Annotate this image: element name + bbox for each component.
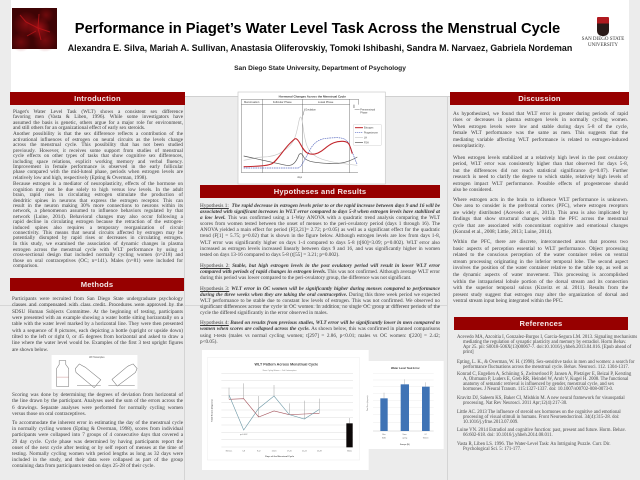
text: discussion paragraph 4: with the superior temporal sulcus (Kravitz et al. 2011). Results from the bbox=[453, 285, 628, 291]
text: hypothesis 3: cycle the differed significantly in the error observed in males. bbox=[200, 310, 328, 316]
text: intro paragraph 1: favoring men (Vasta & Liben, 1996). While some investigators have bbox=[13, 114, 183, 120]
line: normally cycling women bbox=[229, 399, 320, 417]
text: intro paragraph 2: across the menstrual cycle. This possibility that has not been studied bbox=[13, 142, 183, 148]
text: hypothesis 3: during the three weeks when they are taking the oral contraceptive. During this three week period we expected bbox=[200, 292, 440, 298]
text: hypothesis 1: WLT error was significantly higher on days 1-4 compared to days 5-8 (t[60]=3.09; p=0.002). WLT error also bbox=[200, 240, 440, 246]
legend bbox=[354, 125, 381, 145]
chart: WLT pattern across menstrual cycle: 25-28 bbox=[317, 450, 322, 452]
chart: WLT pattern across menstrual cycle: 13-16 bbox=[272, 450, 277, 452]
reference: Kravitz bbox=[457, 395, 625, 406]
heading: hypotheses and results: Hypotheses and Results bbox=[274, 187, 366, 196]
reference: Konrad: hormones. J Neural Transm. 115:1327-1337. doi: 10.1007/s00702-008-0073-0. bbox=[463, 387, 613, 392]
legend: Progesterone bbox=[364, 132, 379, 135]
text: hypothesis 1: associated with significant increases in WLT error compared to days 5-8 when estrogen levels have stabilized at bbox=[200, 209, 440, 215]
chart: hormonal changes across the menstrual cycle: Hormonal Changes Across the Menstrual Cycle bbox=[279, 94, 346, 98]
text: methods paragraph 1: with a sequence of 8 pictures, each depicting a bottle (upright or upside down) bbox=[12, 328, 183, 334]
reference: Konrad: Konrad C, Engelien A, Schöning S, Zwitserlood P, Jansen A, Pletziger E, Beizai P, Kersting bbox=[457, 372, 631, 376]
chart: hormonal changes across the menstrual cycle: Ovulation bbox=[305, 109, 316, 112]
text: intro paragraph 2 bbox=[13, 131, 183, 181]
bars bbox=[380, 384, 429, 431]
reference: Vasta: Vasta R, Liben LS. 1996. The Water-Level Task: An Intriguing Puzzle. Curr. Dir. bbox=[457, 442, 611, 446]
reference: Epting: performance fluctuations across the menstrual cycle. Behav. Neurosci. 112. 1304-1317. bbox=[463, 365, 629, 370]
text: methods paragraph 2: 6 drawings. Separate analyses were performed for normally cycling women bbox=[12, 405, 183, 411]
text: discussion paragraph 2: estrogen impact WLT performance. Possible effects of progesterone should bbox=[453, 181, 628, 187]
legend: FSH bbox=[364, 142, 369, 144]
text: intro paragraph 4: estrogen across the menstrual cycle with WLT performance by using a bbox=[13, 247, 183, 253]
text: hypothesis 2 bbox=[200, 263, 440, 281]
text: discussion paragraph 2 bbox=[453, 155, 628, 193]
chart: WLT pattern across menstrual cycle: Norm. Cycling Women — Oral Contraceptives bbox=[263, 369, 297, 372]
text: hypothesis 1: trend (F[1] = 5.75; p=0.02) that is shown in the figure below. Although estrogen levels are low from days 1-8, bbox=[200, 233, 440, 239]
heading: references bbox=[454, 317, 628, 330]
reference: Little: 10.1016/j.yfrne.2013.07.009. bbox=[463, 420, 518, 425]
text: hypothesis 4: Hypothesis 4: Based on results from previous studies, WLT error will be significantly lower in men compared to bbox=[200, 320, 440, 326]
text: discussion paragraph 1: neuroplasticity. bbox=[453, 143, 485, 149]
chart: hormonal changes across the menstrual cycle: Phase bbox=[360, 111, 368, 114]
text: hypothesis 4: using t-tests (males vs normal cycling women; t[297] = 2.86, p<0.01; males vs OC women: t[220] = 2.42; bbox=[200, 333, 440, 339]
authors: Alexandra E. Silva, Mariah A. Sullivan, Anastasia Oliferovskiy, Tomoki Ishibashi, Sandra M. Narvaez, Gabriela Nordeman bbox=[68, 43, 572, 53]
text: intro paragraph 2: activational influences of estrogen on neural circuits as the levels change bbox=[13, 137, 183, 143]
text: methods paragraph 1: SDSU Human Subjects Committee. At the beginning of testing, participants bbox=[12, 309, 183, 315]
reference: Acevedo: Acevedo MA, Azcoitia I, Gonzalez-Burgos I, Garcia-Segura LM. 2013. Signaling mechanisms bbox=[457, 334, 637, 340]
text: discussion paragraph 3: cycle that are associated with concomitant cognitive and emotional changes bbox=[453, 223, 628, 229]
text: hypothesis 1: ANOVA yielded a main effect for period (F[3,21]= 2.72; p<0.05) as well as a significant effect for the quadratic bbox=[200, 227, 440, 233]
text: discussion paragraph 3: (Konrad et al., 2008; Little, 2013; Luine, 2014). bbox=[453, 229, 552, 235]
text: intro paragraph 2: phase compared with the mid-luteal phase, periods when estrogen levels are bbox=[13, 169, 183, 175]
panel: introduction bbox=[10, 92, 185, 269]
text: methods paragraph 1: line where the water level would be. Examples of the first 3 test upright figures bbox=[12, 340, 183, 346]
line: FSH bbox=[244, 154, 357, 165]
chart: WLT pattern across menstrual cycle: 5-8 bbox=[243, 450, 245, 452]
text: methods paragraph 3: in normally cycling women (Epting & Overman, 1998), scores from individual bbox=[12, 426, 183, 432]
text: hypothesis 1: tested on days 13-16 compared to days 5-8 (t[55] = 3.21; p=0.002). bbox=[200, 252, 340, 258]
chart: WLT pattern across menstrual cycle: Males bbox=[348, 450, 352, 452]
panel: discussion bbox=[450, 92, 629, 304]
logo: San Diego State University: SAN DIEGO STATE bbox=[582, 37, 624, 42]
text: intro paragraph 4: cross-sectional design that included normally cycling women (n=218) and bbox=[13, 252, 183, 258]
text: methods paragraph 3: containing data from participants tested on days 25-28 of their cycle. bbox=[12, 463, 155, 469]
heading: discussion bbox=[450, 92, 629, 105]
text: discussion paragraph 3: findings that show structural changes within the PFC across the menstrual bbox=[453, 216, 628, 222]
chart: hormonal changes across the menstrual cycle: Luteal Phase bbox=[318, 100, 334, 104]
text: methods paragraph 3 bbox=[12, 420, 183, 469]
text: methods paragraph 1: classes and compensated with class credit. Procedures were approved by the bbox=[12, 302, 183, 308]
chart: water level task error bars: Women bbox=[423, 438, 428, 440]
reference: Kravitz: processing. Nat Rev Neurosci. 2011 Apr;12(4):217-30. bbox=[463, 401, 567, 406]
reference: Luine: Luine VN. 2014 Estradiol and cognitive function: past, present and future. Horm. Behav. bbox=[457, 428, 626, 432]
chart: hormonal changes across the menstrual cycle: Follicular Phase bbox=[273, 100, 292, 104]
text: hypothesis 1 bbox=[200, 203, 440, 258]
chart: WLT pattern across menstrual cycle: 9-12 bbox=[257, 450, 261, 452]
title: Performance in Piaget’s Water Level Task Across the Menstrual Cycle bbox=[75, 21, 560, 37]
text: methods paragraph 1: Participants were recruited from San Diego State undergraduate psychology bbox=[12, 296, 183, 302]
text: discussion paragraph 2: also be considered. bbox=[453, 187, 493, 193]
text: intro paragraph 2: relatively low and high, respectively (Epting & Overman, 1998). bbox=[13, 175, 147, 181]
text: discussion paragraph 4: the dynamic aspects of water movement. This processing is accomplished bbox=[453, 272, 628, 278]
icon: upright bottle bbox=[57, 361, 69, 386]
chart: water level task error bars: OC bbox=[424, 434, 427, 436]
logo: San Diego State University bbox=[582, 17, 624, 48]
reference: Konrad bbox=[457, 372, 632, 392]
error bars bbox=[229, 383, 350, 423]
text: methods paragraph 3: 29 day cycle. Cycle phase was determined by having participants report the bbox=[12, 438, 183, 444]
text: hypothesis 4: p<0.05). bbox=[200, 339, 218, 345]
line: oral contraceptive women bbox=[229, 395, 320, 430]
text: methods paragraph 2: versus those on oral contraceptives. bbox=[12, 411, 86, 417]
reference: Epting bbox=[457, 359, 635, 370]
text: intro paragraph 3: induced spines also requires a temporary reorganization of circuit bbox=[13, 225, 183, 231]
heading: references: References bbox=[520, 319, 562, 328]
line: estrogen bbox=[244, 139, 352, 167]
text: hypothesis 1: a low level. This was confirmed using a 1-Way ANOVA with a quadratic trend analysis comparing the WLT bbox=[200, 215, 440, 221]
reference: Luine: 66:602-618. doi: 10.1016/j.yhbeh.2014.08.011. bbox=[463, 433, 553, 438]
text: discussion paragraph 4: related to the conscious perception of the water container relies on ventral bbox=[453, 252, 628, 258]
text: hypothesis 3: WLT performance to be stable due to constant low levels of estrogen. This was not confirmed. We observed no bbox=[200, 298, 440, 304]
text: methods paragraph 1: tilted to the left or right 0, or 45 degrees from horizontal and asked to draw a bbox=[12, 334, 183, 340]
text: methods paragraph 2: the line drawn by the participant. Analyses used the sum of the errors across the bbox=[12, 398, 183, 404]
chart: WLT pattern across menstrual cycle: p=0.002 bbox=[240, 434, 248, 436]
text: discussion paragraph 4: involves the position of the water container relative to the table top, as well as bbox=[453, 265, 628, 271]
text: methods paragraph 2 bbox=[12, 392, 183, 417]
text: discussion paragraph 1: female WLT performance was the same as men. This suggests that the bbox=[453, 130, 628, 136]
text: discussion paragraph 4: within the intraparietal lobule portion of the dorsal stream and its connection bbox=[453, 279, 628, 285]
reference: Little: Little AC. 2013 The influence of steroid sex hormones on the cognitive and emotional bbox=[457, 410, 621, 414]
text: intro paragraph 3: cognition may not be due solely to high versus low levels. In the adult bbox=[13, 187, 183, 193]
diagram: WLT example bottles bbox=[52, 355, 138, 389]
text: discussion paragraph 3: are widely distributed (Acevedo et al., 2013). This area is also implicated by bbox=[453, 210, 628, 216]
chart: hormonal changes across the menstrual cycle: Menstruation bbox=[244, 100, 260, 104]
chart: WLT pattern across menstrual cycle: Total Errors (degrees) bbox=[211, 399, 214, 422]
chart: water level task error bars: Norm bbox=[402, 434, 407, 436]
chart: hormonal changes across the menstrual cycle: days bbox=[297, 177, 303, 179]
text: discussion paragraph 1: As hypothesized, we found that WLT error is greater during periods of rapid bbox=[453, 111, 628, 117]
text: discussion paragraph 3 bbox=[453, 197, 628, 235]
text: hypothesis 4 bbox=[200, 320, 440, 345]
text: intro paragraph 4: In this study, we examined the association of dynamic changes in plasma bbox=[13, 241, 183, 247]
chart: water level task error bars: cycling bbox=[402, 438, 407, 440]
chart: water level task error bars: Total Error (degrees) bbox=[366, 395, 369, 411]
legend: LH bbox=[364, 138, 367, 140]
heading: introduction: Introduction bbox=[74, 94, 121, 103]
text: intro paragraph 4: comparison. bbox=[13, 263, 38, 269]
chart: WLT pattern across menstrual cycle bbox=[202, 350, 368, 470]
chart: water level task error bars: Groups (N) bbox=[400, 444, 410, 446]
text: intro paragraph 4: those on oral contraceptives (OC; n=141). Males (n=81) were included for bbox=[13, 258, 183, 264]
logo: red neuron micrograph bbox=[12, 8, 57, 52]
text: methods paragraph 3: onset of the next cycle after testing or by self report of menses at the time of bbox=[12, 445, 183, 451]
text: hypothesis 1: Hypothesis 1: The rapid decrease in estrogen levels prior to or the rapid increase between days 9 and 16 will be bbox=[200, 203, 440, 209]
reference: Vasta bbox=[457, 442, 611, 452]
bar: males bbox=[347, 423, 353, 447]
text: methods paragraph 1 bbox=[12, 296, 183, 353]
panel: hypotheses and results bbox=[200, 185, 440, 345]
text: methods paragraph 1: table with the water level marked by a horizontal line. They were then presented bbox=[12, 321, 183, 327]
chart: WLT pattern across menstrual cycle: Menses bbox=[226, 450, 233, 452]
reference: Little bbox=[457, 409, 621, 425]
text: methods paragraph 3: included in the study, and their data were collapsed as part of the group bbox=[12, 457, 183, 463]
text: hypothesis 1: increased as estrogen levels increased linearly between days 9 and 16, and was significantly higher in women bbox=[200, 246, 440, 252]
text: intro paragraph 4 bbox=[13, 241, 183, 269]
panel: references bbox=[454, 317, 638, 452]
text: intro paragraph 1: Piaget's Water Level Task (WLT) shows a consistent sex difference bbox=[13, 109, 183, 115]
line: progesterone bbox=[244, 138, 357, 168]
reference: Epting: Epting, L. K., & Overman, W. H. (1998). Sex-sensitive tasks in men and women: a search for bbox=[457, 360, 635, 364]
text: hypothesis 2: during this period was lower compared to the peri-ovulatory group, the difference was not significant. bbox=[200, 275, 411, 281]
reference: Luine bbox=[457, 427, 626, 438]
chart: WLT pattern across menstrual cycle: 21-24 bbox=[302, 450, 307, 452]
text: discussion paragraph 4: ventral stream input being integrated within the PFC. bbox=[453, 298, 563, 304]
text: intro paragraph 1 bbox=[13, 109, 183, 131]
reference: Vasta: Psychological Sci. 5: 171-177. bbox=[463, 447, 521, 452]
text: discussion paragraph 1 bbox=[453, 111, 628, 149]
text: discussion paragraph 3: One area to consider is the prefrontal cortex (PFC), where estrogen receptors bbox=[453, 203, 628, 209]
text: intro paragraph 1: and still others for an organizational effect of early sex steroids. bbox=[13, 125, 145, 131]
text: methods paragraph 1: were presented with an example showing a water bottle sitting horizontally on a bbox=[12, 315, 183, 321]
icon: bottle tilted right bbox=[108, 364, 137, 386]
chart: hormonal changes across the menstrual cycle bbox=[238, 92, 386, 184]
text: discussion paragraph 4: stream processing originating in the inferior temporal lobe. The second aspect bbox=[453, 259, 628, 265]
reference: Acevedo: mediating the regulation of synaptic plasticity and memory by estradiol. Horm Behav. bbox=[463, 340, 626, 345]
text: discussion paragraph 2: When estrogen levels stabilized at a relatively high level in the post ovulatory bbox=[453, 155, 628, 161]
text: discussion paragraph 2: but the differences did not reach statistical significance (p=0.07). Further bbox=[453, 168, 628, 174]
text: intro paragraph 3: network (Luine, 2014). Behavioral changes may also occur following a bbox=[13, 214, 183, 220]
heading: methods: Methods bbox=[81, 280, 113, 289]
chart: WLT pattern across menstrual cycle: Days of the Menstrual Cycle bbox=[266, 455, 295, 458]
text: intro paragraph 3: brain, rapid rises in circulating estrogen stimulate the production of bbox=[13, 192, 183, 198]
text: discussion paragraph 4 bbox=[453, 239, 628, 304]
text: hypothesis 2: Hypothesis 2: Stable, but high estrogen levels in the post ovulatory period will result in lower WLT error bbox=[200, 263, 440, 269]
chart: hormonal changes across the menstrual cycle: Premenstrual bbox=[360, 108, 376, 111]
panel: methods bbox=[10, 278, 184, 469]
reference: Acevedo: Apr 25. pii: S0018-506X(13)00067-7. doi:10.1016/j.yhbeh.2013.04.016. [Epub ahead of bbox=[463, 345, 631, 350]
text: intro paragraph 2: Another possibility is that the sex difference reflects a contribution of the bbox=[13, 131, 183, 137]
text: intro paragraph 3: result in the neuron making 30% more connections to neurons within its bbox=[13, 203, 183, 209]
reference: Kravitz: Kravitz DJ, Saleem KS, Baker CI, Mishkin M. A new neural framework for visuospatial bbox=[457, 396, 625, 400]
text: intro paragraph 3: connectivity. This means that neural circuits affected by estrogen may be bbox=[13, 230, 183, 236]
line: LH bbox=[244, 117, 357, 165]
text: intro paragraph 3: rapid decline in circulating estrogen because the retraction of the estrogen- bbox=[13, 219, 183, 225]
text: hypothesis 4: women when scores are collapsed across the cycle. As shown below, this was confirmed in planned comparisons bbox=[200, 326, 440, 332]
text: intro paragraph 2: including space relations, explicit working memory and verbal fluency. bbox=[13, 159, 183, 165]
text: hypothesis 2: compared with periods of rapid changes in estrogen levels. This was not confirmed. Although average WLT error bbox=[200, 269, 440, 275]
text: intro paragraph 3 bbox=[13, 181, 183, 241]
text: discussion paragraph 1: mediating variable affecting WLT performance is related to estrogen-induced bbox=[453, 137, 628, 143]
text: methods paragraph 3: testing. Normally cycling women with period lengths as long as 32 days were bbox=[12, 451, 183, 457]
text: intro paragraph 2: previously. However, it receives some support from studies of menstrual bbox=[13, 148, 183, 154]
text: discussion paragraph 3: Where estrogen acts in the brain to influence WLT performance is unknown. bbox=[453, 197, 628, 203]
text: intro paragraph 1: assumed the basis is genetic, others argue for a major role for environment, bbox=[13, 120, 183, 126]
text: methods paragraph 1: are shown below. bbox=[12, 347, 48, 353]
legend: Estrogen bbox=[364, 127, 374, 130]
text: discussion paragraph 4: basic aspects of perception essential to WLT performance. Object processing bbox=[453, 246, 628, 252]
text: methods paragraph 3: To accommodate the inherent error in estimating the day of the menstrual cycle bbox=[12, 420, 183, 426]
logo: San Diego State University: UNIVERSITY bbox=[588, 43, 618, 48]
text: intro paragraph 3: potentially disrupted by rapid rises or decreases in circulating estrogen. bbox=[13, 235, 183, 241]
text: methods paragraph 3: participants were collapsed into 7 groups of 4 consecutive days that covered a bbox=[12, 432, 183, 438]
text: discussion paragraph 2: period, WLT error was consistently higher than that observed for days 5-8, bbox=[453, 161, 628, 167]
text: discussion paragraph 4: Within the PFC, there are discrete, interconnected areas that process two bbox=[453, 239, 628, 245]
chart: WLT pattern across menstrual cycle: 17-20 bbox=[287, 450, 292, 452]
chart: water level task error bars: N=81 bbox=[382, 438, 386, 440]
text: intro paragraph 3: network, a phenomenon assumed to influence behaviors regulated by that bbox=[13, 208, 183, 214]
heading: hypotheses and results bbox=[200, 185, 440, 198]
heading: methods bbox=[10, 278, 184, 291]
text: hypothesis 3: significant differences across the cycle in OC women. In addition, no single OC group at different periods of the bbox=[200, 304, 440, 310]
reference: Acevedo: print] bbox=[463, 350, 474, 355]
text: intro paragraph 3: dendritic spines in neurons that express the estrogen receptor. This can bbox=[13, 198, 183, 204]
reference: Acevedo bbox=[457, 334, 638, 355]
text: methods paragraph 2: Scoring was done by determining the degrees of deviation from horizontal of bbox=[12, 392, 183, 398]
reference: Konrad: anatomy of semantic retrieval is influenced by gender, menstrual cycle, and sex bbox=[463, 382, 614, 387]
text: discussion paragraph 1: rises or decreases in plasma estrogen levels in normally cycling women. bbox=[453, 117, 628, 123]
heading: introduction bbox=[10, 92, 185, 105]
affiliation: San Diego State University, Department of Psychology bbox=[234, 65, 406, 72]
reference: Konrad: A, Ohrmann P, Luders E, Greb RR, Heindel W, Arolt V, Kugel H. 2008. The functional bbox=[463, 377, 628, 382]
text: hypothesis 3: Hypothesis 3: WLT error in OC women will be significantly higher during menses compared to performance bbox=[200, 286, 440, 292]
text: hypothesis 3 bbox=[200, 286, 440, 316]
text: discussion paragraph 2: research is need to clarify the degree to which stable, relatively high levels of bbox=[453, 174, 628, 180]
text: intro paragraph 2: Improvement in female performance is observed in the early follicular bbox=[13, 164, 183, 170]
chart: water level task error bars bbox=[366, 361, 444, 449]
text: hypothesis 1: scores from women tested between the onset of menses to the peri-ovulatory period (days 1 through 16). The bbox=[200, 221, 440, 227]
icon: bottle tilted left bbox=[75, 364, 101, 388]
diagram: WLT example bottles: WLT Examples bbox=[89, 357, 105, 359]
chart: water level task error bars: Water Level Task Error bbox=[391, 366, 419, 370]
text: discussion paragraph 1: When estrogen levels were low and stable during days 5-8 of the cycle, bbox=[453, 124, 628, 130]
chart: water level task error bars: Men bbox=[382, 434, 385, 436]
reference: Little: processing of visual stimuli in humans. Front Neuroendocrinol. 34(4):315-28. doi: bbox=[463, 415, 619, 420]
chart: WLT pattern across menstrual cycle: WLT Pattern Across Menstrual Cycle bbox=[255, 362, 318, 366]
text: intro paragraph 2: cycle effects on other types of tasks that show cognitive sex differences, bbox=[13, 153, 183, 159]
text: discussion paragraph 4: present study suggest that estrogen may alter the organization of dorsal and bbox=[453, 292, 628, 298]
text: intro paragraph 3: Because estrogen is a mediator of neuroplasticity, effects of the hormone on bbox=[13, 181, 183, 187]
heading: discussion: Discussion bbox=[518, 94, 561, 103]
